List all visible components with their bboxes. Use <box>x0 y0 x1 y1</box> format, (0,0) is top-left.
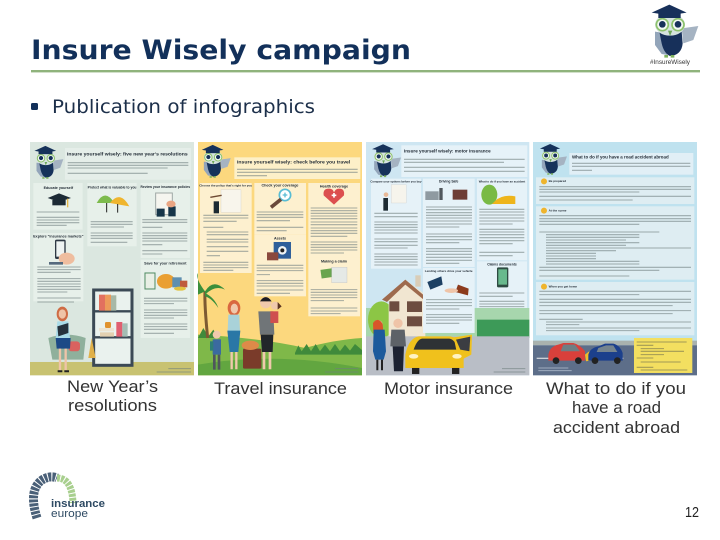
icon: Insure Wisely owl logo: #InsureWisely <box>650 59 691 66</box>
title underline <box>31 70 700 72</box>
panel: Road accident abroad infographic: Be prepared <box>549 179 566 183</box>
panel: New Year's resolutions infographic <box>30 142 194 375</box>
panel: Road accident abroad infographic: When you get home <box>549 284 577 288</box>
title: Insure Wisely campaign <box>31 35 411 66</box>
panel: Travel insurance infographic: Health coverage <box>320 184 348 188</box>
panel: New Year's resolutions infographic: Review your insurance policies <box>141 185 190 189</box>
panel: New Year's resolutions infographic: Educate yourself <box>44 186 74 190</box>
logo: insurance europe: insurance <box>51 498 105 510</box>
panel: Motor insurance infographic: Driving Safe <box>439 180 459 184</box>
caption: Travel insurance: Travel insurance <box>214 379 347 398</box>
caption: What to do if you have a road accident abroad: What to do if you <box>546 379 686 398</box>
panel: Motor insurance infographic <box>366 142 529 375</box>
panel: Travel insurance infographic: Choose the policy that's right for you <box>199 184 252 188</box>
caption: What to do if you have a road accident abroad: have a road <box>572 398 661 417</box>
panel: Road accident abroad infographic: At the scene <box>549 208 567 212</box>
panel: Motor insurance infographic: Lending others drive your vehicle <box>425 269 473 273</box>
panel: Road accident abroad infographic <box>533 142 697 375</box>
panel: Travel insurance infographic: Insure yourself wisely: check before you travel <box>237 159 351 165</box>
caption: What to do if you have a road accident abroad <box>546 379 686 437</box>
caption: Motor insurance: Motor insurance <box>384 379 513 398</box>
panel: New Year's resolutions infographic: Explore "insurance markets" <box>33 234 84 238</box>
page number: 12 <box>685 504 699 521</box>
panel: Motor insurance infographic: What to do if you have an accident <box>479 180 525 184</box>
caption: New Year's resolutions: New Year’s <box>67 377 158 396</box>
panel: Motor insurance infographic: Compare your options before you buy <box>370 180 422 184</box>
panel: Motor insurance infographic: Claims documents <box>487 263 517 267</box>
icon: Insure Wisely owl logo <box>650 5 698 66</box>
caption: New Year's resolutions <box>67 377 158 415</box>
panel: New Year's resolutions infographic: Protect what is valuable to you <box>88 185 136 189</box>
caption: What to do if you have a road accident abroad: accident abroad <box>553 418 680 437</box>
panel: New Year's resolutions infographic: Insure yourself wisely: five new year's resolutions <box>67 151 188 157</box>
panel: Travel insurance infographic: Making a claim <box>321 260 348 264</box>
logo: insurance europe <box>33 477 105 520</box>
caption: New Year's resolutions: resolutions <box>68 396 157 415</box>
panel: Motor insurance infographic: Insure yourself wisely: motor insurance <box>404 148 491 153</box>
panel: Travel insurance infographic: Assets <box>274 236 286 240</box>
bullet point: publication of infographics: Publication of infographics <box>52 96 315 118</box>
panel: New Year's resolutions infographic: Save for your retirement <box>144 262 187 266</box>
panel: Road accident abroad infographic: What to do if you have a road accident abroad <box>572 155 669 160</box>
panel: Travel insurance infographic <box>197 142 362 375</box>
logo: insurance europe: europe <box>51 508 88 520</box>
panel: Travel insurance infographic: Check your coverage <box>261 184 298 188</box>
